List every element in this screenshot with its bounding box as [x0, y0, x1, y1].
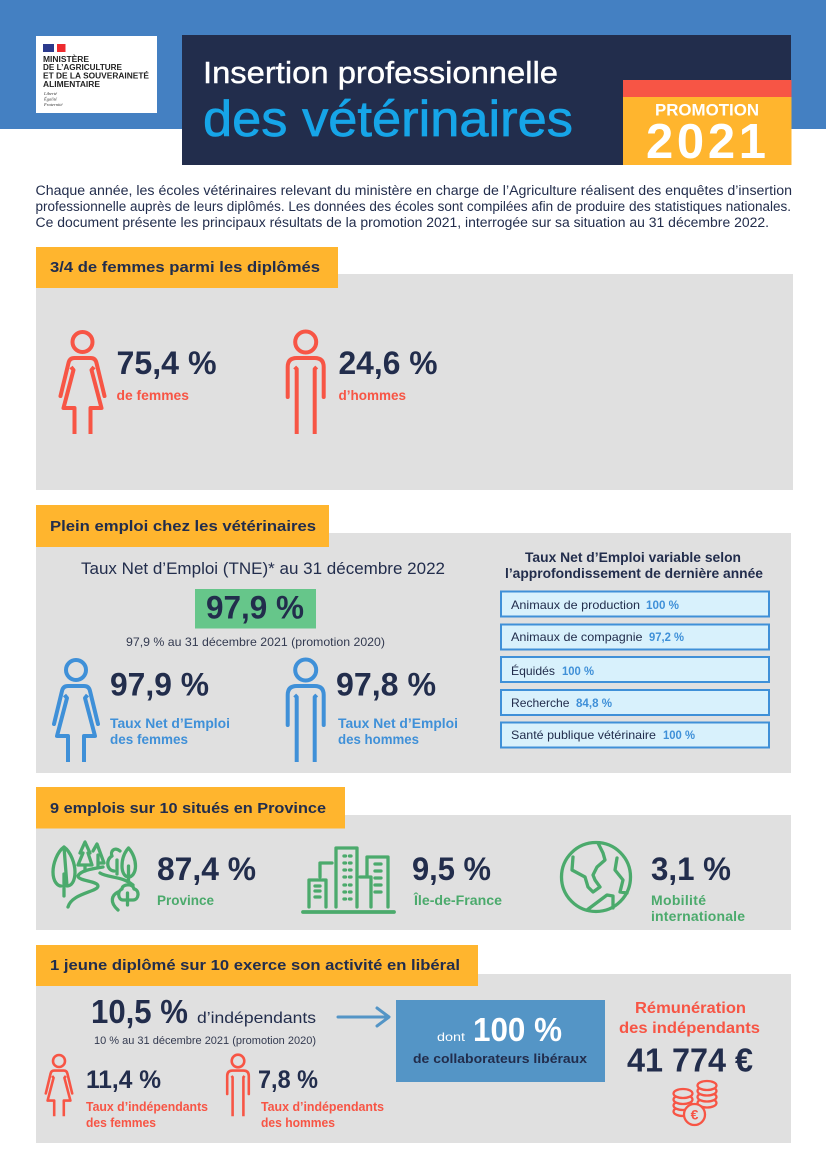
- stat: île-de-france: Île-de-France: [413, 891, 502, 908]
- intro text: Ce document présente les principaux résultats de la promotion 2021, interrogée sur sa situation au 31 décembre 2022.: [36, 215, 769, 230]
- stat: rémunération: Rémunération: [635, 1000, 746, 1017]
- stat: 10,5 % d'indépendants: [91, 993, 316, 1047]
- badge: promotion 2021: [623, 80, 792, 169]
- logo: ministère: ET DE LA SOUVERAINETÉ: [43, 72, 150, 80]
- stat: women 75,4 %: [116, 345, 216, 403]
- icon: woman: [60, 332, 104, 434]
- stat: men independents: des hommes: [261, 1116, 335, 1130]
- intro text: professionnelle auprès de leurs diplômés. Les données des écoles sont compilées afin de produire des statistiques nationales.: [36, 199, 791, 214]
- icon: man: [288, 332, 324, 434]
- panel: activité en libéral: [36, 945, 791, 1143]
- TNE subtitle: Taux Net d’Emploi (TNE)* au 31 décembre 2022: [81, 559, 445, 578]
- stat: men 24,6 %: 24,6 %: [338, 345, 438, 381]
- stat: île-de-france: [412, 851, 502, 908]
- stat: TNE men: 97,8 %: [336, 666, 436, 702]
- icon: man: [288, 660, 324, 762]
- TNE previous year: 97,9 % au 31 décembre 2021 (promotion 2020): [126, 635, 385, 649]
- row: équidés: [501, 657, 769, 682]
- logo: ministère: Fraternité: [43, 102, 63, 107]
- stat: TNE women: Taux Net d’Emploi: [110, 715, 230, 731]
- row: recherche: [501, 690, 769, 715]
- stat: mobilité internationale: 3,1 %: [651, 851, 731, 887]
- TNE by specialisation heading: l’approfondissement de dernière année: [505, 566, 763, 581]
- stat: women independents: Taux d’indépendants: [86, 1100, 208, 1114]
- TNE by specialisation heading: Taux Net d’Emploi variable selon: [525, 550, 741, 565]
- heading tab: 1 jeune diplômé sur 10 exerce son activité en libéral: [50, 957, 460, 974]
- stat: 10,5 % d'indépendants: d’indépendants: [197, 1010, 316, 1027]
- panel: femmes parmi les diplômés: [36, 247, 793, 490]
- panel: emplois en province: [36, 787, 791, 930]
- TNE value box: 97,9 %: [206, 590, 304, 626]
- box: collaborateurs libéraux: [396, 1000, 605, 1082]
- logo: ministère: MINISTÈRE: [43, 55, 90, 64]
- logo: ministère: Liberté: [43, 91, 58, 96]
- stat: men 24,6 %: d’hommes: [338, 387, 406, 403]
- logo: ministère: DE L’AGRICULTURE: [43, 63, 123, 72]
- heading tab: 3/4 de femmes parmi les diplômés: [50, 259, 320, 276]
- icon: woman: [54, 660, 98, 762]
- stat: men independents: 7,8 %: [258, 1066, 318, 1094]
- box: collaborateurs libéraux: 100 %: [473, 1011, 562, 1048]
- row: équidés: 100 %: [562, 664, 594, 678]
- icon: globe: [562, 842, 630, 912]
- stat: rémunération: [619, 1000, 760, 1078]
- stat: île-de-france: 9,5 %: [412, 851, 491, 887]
- stat: TNE women: 97,9 %: [110, 666, 209, 702]
- stat: province: [157, 851, 256, 908]
- heading tab: [36, 247, 338, 288]
- stat: mobilité internationale: Mobilité: [651, 892, 706, 908]
- row: recherche: Recherche: [511, 696, 570, 710]
- stat: TNE men: des hommes: [338, 731, 419, 747]
- heading tab: [36, 505, 329, 547]
- stat: TNE women: des femmes: [110, 731, 188, 747]
- stat: 10,5 % d'indépendants: 10 % au 31 décembre 2021 (promotion 2020): [94, 1035, 316, 1047]
- heading tab: Plein emploi chez les vétérinaires: [50, 518, 316, 535]
- arrow: [338, 1008, 389, 1026]
- row: animaux de compagnie: Animaux de compagnie: [511, 630, 643, 644]
- stat: women independents: 11,4 %: [86, 1066, 161, 1094]
- box: collaborateurs libéraux: de collaborateurs libéraux: [413, 1051, 588, 1066]
- icon: coins: €: [691, 1106, 699, 1122]
- title line 2: des vétérinaires: [203, 91, 573, 147]
- row: animaux de compagnie: [501, 624, 769, 650]
- row: recherche: 84,8 %: [576, 696, 612, 710]
- box: collaborateurs libéraux: dont: [437, 1030, 466, 1044]
- intro text: [36, 183, 792, 230]
- stat: men 24,6 %: [338, 345, 438, 403]
- logo: ministère: ALIMENTAIRE: [43, 80, 101, 89]
- heading tab: [36, 945, 478, 986]
- badge: promotion 2021: 2021: [646, 115, 766, 169]
- stat: TNE men: [336, 666, 458, 747]
- intro text: Chaque année, les écoles vétérinaires relevant du ministère en charge de l’Agriculture réalisent des enquêtes d’insertion: [36, 183, 792, 198]
- stat: province: Province: [157, 892, 214, 908]
- icon: woman: [46, 1055, 72, 1116]
- stat: TNE women: [110, 666, 230, 747]
- icon: man: [227, 1055, 249, 1116]
- stat: men independents: [258, 1066, 384, 1130]
- stat: men independents: Taux d’indépendants: [261, 1100, 384, 1114]
- heading tab: 9 emplois sur 10 situés en Province: [50, 800, 326, 817]
- stat: rémunération: 41 774 €: [627, 1042, 753, 1078]
- row: animaux de production: Animaux de production: [511, 598, 640, 612]
- stat: women 75,4 %: 75,4 %: [116, 345, 216, 381]
- row: santé publique vétérinaire: Santé publique vétérinaire: [511, 728, 656, 742]
- row: santé publique vétérinaire: [501, 722, 769, 748]
- heading tab: [36, 787, 345, 828]
- row: animaux de production: [501, 592, 769, 616]
- row: santé publique vétérinaire: 100 %: [663, 728, 695, 742]
- stat: province: 87,4 %: [157, 851, 256, 887]
- row: animaux de compagnie: 97,2 %: [649, 630, 684, 644]
- title line 1: Insertion professionnelle: [203, 55, 558, 90]
- header band: [0, 0, 826, 129]
- logo: ministère: Égalité: [43, 96, 58, 102]
- stat: women independents: [86, 1066, 208, 1130]
- row: équidés: Équidés: [511, 663, 555, 678]
- icon: buildings: [303, 848, 394, 912]
- stat: rémunération: des indépendants: [619, 1020, 760, 1037]
- stat: women 75,4 %: de femmes: [116, 387, 189, 403]
- TNE by specialisation heading: [505, 550, 763, 581]
- title block: [182, 35, 791, 165]
- stat: 10,5 % d'indépendants: 10,5 %: [91, 993, 188, 1030]
- row: animaux de production: 100 %: [646, 598, 679, 612]
- icon: landscape: [53, 842, 138, 910]
- badge: promotion 2021: PROMOTION: [655, 102, 759, 120]
- icon: coins: [674, 1081, 716, 1125]
- stat: TNE men: Taux Net d’Emploi: [338, 715, 458, 731]
- logo: ministère: [36, 36, 157, 113]
- stat: mobilité internationale: [651, 851, 745, 924]
- stat: mobilité internationale: internationale: [651, 908, 745, 924]
- stat: women independents: des femmes: [86, 1116, 156, 1130]
- panel: plein emploi: [36, 505, 791, 773]
